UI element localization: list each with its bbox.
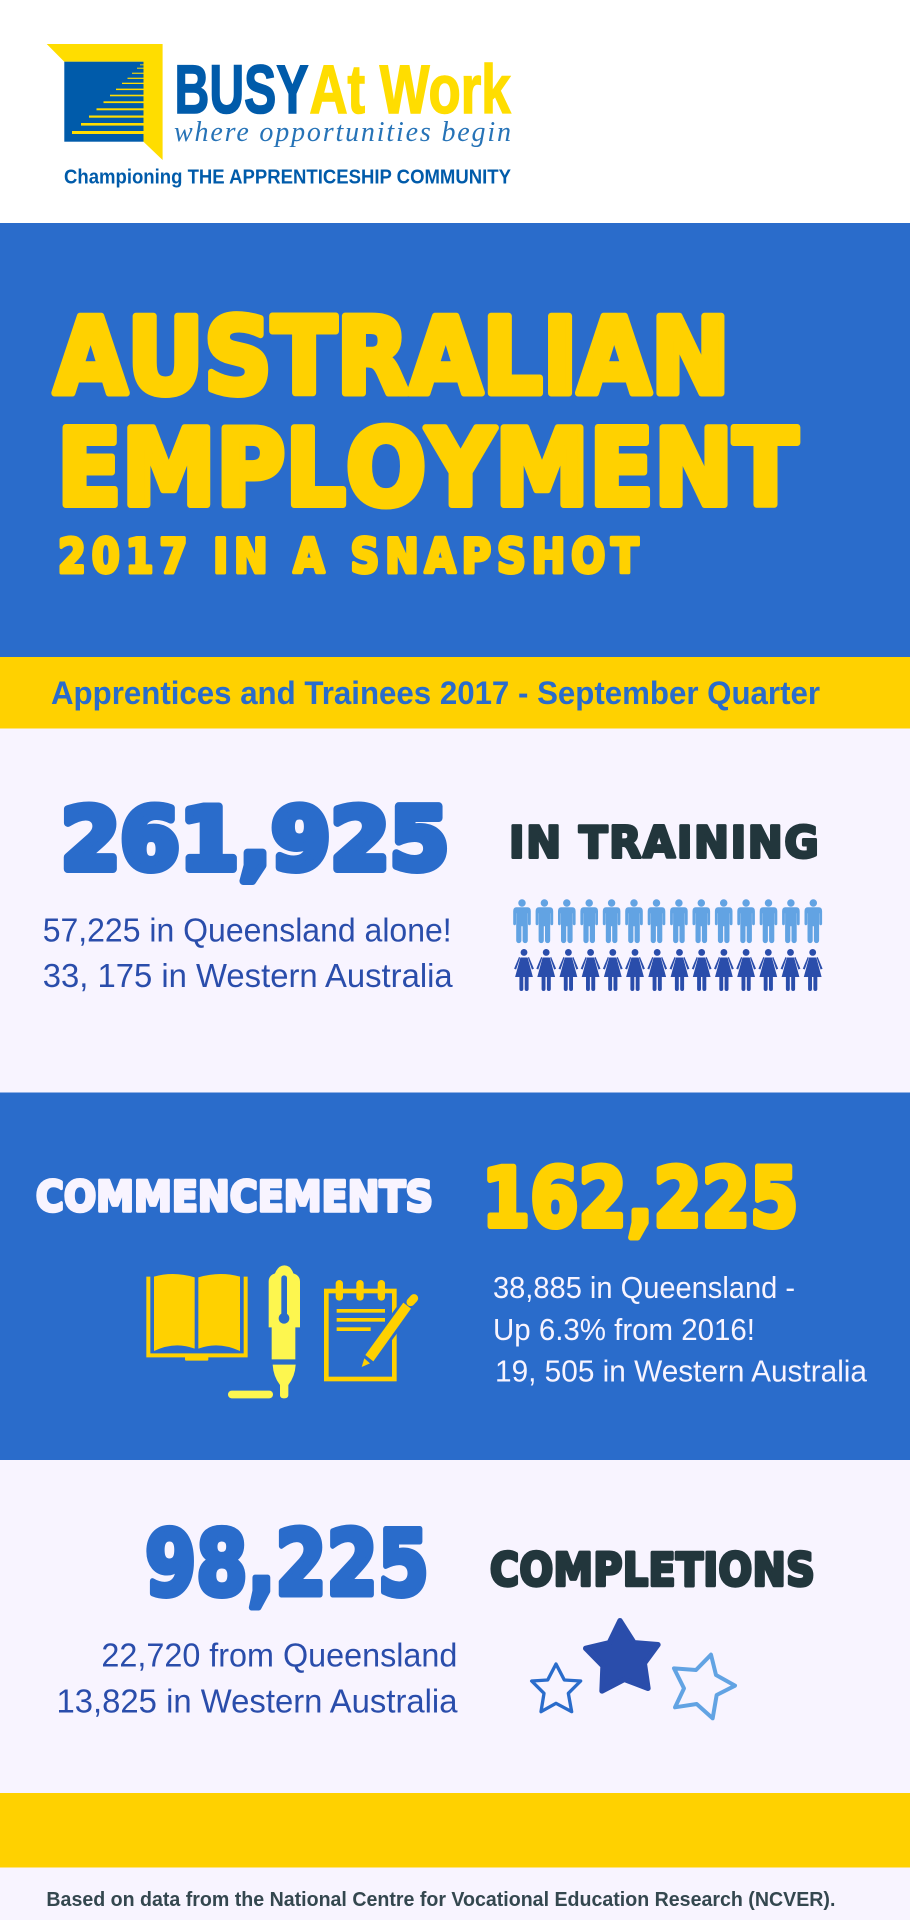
panel: title [0, 223, 910, 657]
heading: completions: COMPLETIONS [490, 1544, 815, 1596]
star: left outline [532, 1664, 581, 1712]
heading: commencements: COMMENCEMENTS [36, 1173, 433, 1222]
panel: in training [0, 728, 910, 1092]
subtitle: 2017 IN A SNAPSHOT [58, 530, 639, 584]
panel: source note [0, 1868, 910, 1920]
text: completions details: 22,720 from Queensland [101, 1637, 457, 1674]
icon: three stars [532, 1621, 735, 1718]
logo icon: yellow frame and blue square [47, 44, 163, 160]
source text: Based on data from the National Centre for Vocational Education Research (NCVER). [46, 1889, 835, 1911]
text: commencements details: 19, 505 in Western Australia [495, 1354, 868, 1389]
title line 1: AUSTRALIAN [54, 295, 730, 418]
panel: completions [0, 1460, 910, 1793]
panel: commencements [0, 1092, 910, 1460]
star: centre filled [586, 1621, 658, 1691]
text: commencements details: 38,885 in Queensland - [493, 1270, 795, 1305]
statistic: 162,225: 162,225 [482, 1151, 798, 1245]
text: commencements details [493, 1270, 868, 1389]
heading: in training: IN TRAINING [509, 818, 819, 869]
logo tagline: where opportunities begin [174, 117, 511, 148]
logo wordmark: At Work: At Work [310, 51, 511, 128]
statistic: 98,225: 98,225 [145, 1512, 429, 1616]
logo strapline: Championing THE APPRENTICESHIP COMMUNITY [64, 166, 512, 188]
text: completions details [56, 1637, 458, 1719]
panel: subtitle band [0, 657, 910, 728]
text: in training details: 57,225 in Queensland alone! [43, 912, 452, 949]
text: commencements details: Up 6.3% from 2016! [493, 1312, 755, 1347]
statistic: 261,925: 261,925 [61, 790, 449, 890]
icon: notepad and pencil [326, 1280, 414, 1379]
logo: BUSY At Work [47, 44, 512, 188]
icon: open book [148, 1274, 246, 1361]
text: completions details: 13,825 in Western Australia [56, 1682, 458, 1719]
text: in training details [43, 912, 453, 994]
title line 2: EMPLOYMENT [57, 407, 798, 530]
icon: fountain pen [228, 1265, 300, 1398]
text: in training details: 33, 175 in Western Australia [43, 957, 453, 994]
band heading: Apprentices and Trainees 2017 - September Quarter [51, 675, 820, 711]
star: right outline [674, 1655, 735, 1718]
icon row: men [513, 899, 822, 943]
header: white logo band [0, 0, 910, 223]
panel: yellow footer band [0, 1793, 910, 1868]
logo wordmark: BUSY: BUSY [174, 51, 308, 128]
icon row: women [514, 949, 823, 991]
